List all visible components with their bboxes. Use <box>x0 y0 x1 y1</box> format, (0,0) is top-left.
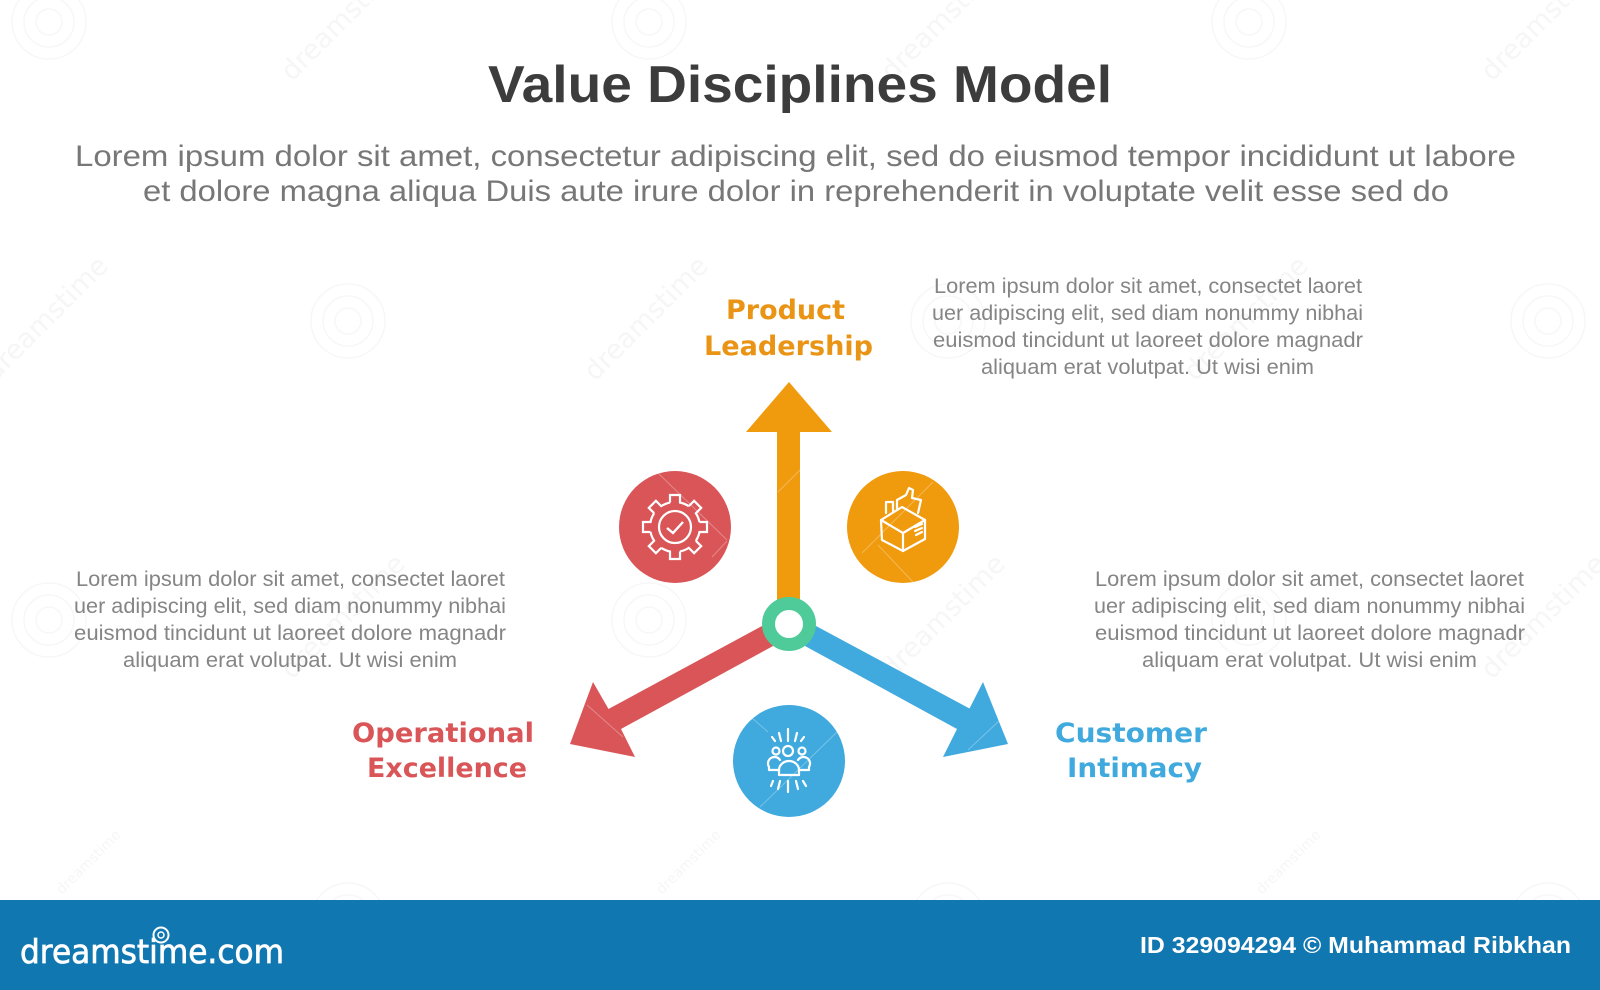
label: customer intimacy: Customer <box>1055 718 1208 749</box>
text block: customer intimacy: aliquam erat volutpat. Ut wisi enim <box>1142 648 1477 672</box>
text block: customer intimacy: euismod tincidunt ut laoreet dolore magnadr <box>1095 621 1525 645</box>
label: product leadership: Product <box>726 295 845 326</box>
label: operational excellence <box>352 718 534 784</box>
footer credit: ID 329094294 © Muhammad Ribkhan <box>1140 932 1571 958</box>
label: customer intimacy: Intimacy <box>1067 753 1202 784</box>
text block: operational excellence: euismod tincidunt ut laoreet dolore magnadr <box>74 621 506 645</box>
arrow: operational excellence <box>570 626 773 757</box>
text block: operational excellence <box>74 567 506 672</box>
icon: gear check on red circle <box>619 471 731 583</box>
subtitle text block: et dolore magna aliqua Duis aute irure dolor in reprehenderit in voluptate velit esse sed do <box>143 175 1449 208</box>
label: product leadership: Leadership <box>704 331 873 362</box>
footer logo: dreamstime.com <box>20 932 284 971</box>
text block: customer intimacy: Lorem ipsum dolor sit amet, consectet laoret <box>1095 567 1524 591</box>
label: customer intimacy <box>1055 718 1208 784</box>
text: dreamstime <box>578 250 715 387</box>
text: dreamstime <box>275 548 412 685</box>
text block: product leadership: uer adipiscing elit, sed diam nonummy nibhai <box>932 301 1363 325</box>
text block: product leadership: Lorem ipsum dolor sit amet, consectet laoret <box>934 274 1362 298</box>
text block: product leadership: euismod tincidunt ut laoreet dolore magnadr <box>933 328 1363 352</box>
subtitle text block <box>75 140 1516 208</box>
subtitle text block: Lorem ipsum dolor sit amet, consectetur adipiscing elit, sed do eiusmod tempor incididunt ut labore <box>75 140 1516 173</box>
text block: operational excellence: Lorem ipsum dolor sit amet, consectet laoret <box>76 567 505 591</box>
label: product leadership <box>704 295 873 362</box>
text: dreamstime <box>54 827 124 898</box>
center ring <box>768 604 810 644</box>
icon: box with thumbs up on orange circle <box>847 471 959 583</box>
text: dreamstime <box>1254 827 1324 898</box>
title: Value Disciplines Model <box>488 56 1112 114</box>
arrow: customer intimacy <box>805 626 1008 757</box>
text block: customer intimacy <box>1094 567 1525 672</box>
text block: operational excellence: uer adipiscing elit, sed diam nonummy nibhai <box>74 594 506 618</box>
label: operational excellence: Excellence <box>367 753 527 784</box>
text block: operational excellence: aliquam erat volutpat. Ut wisi enim <box>123 648 457 672</box>
text block: product leadership: aliquam erat volutpat. Ut wisi enim <box>981 355 1314 379</box>
text: dreamstime <box>1178 250 1315 387</box>
text: dreamstime <box>875 548 1012 685</box>
text block: customer intimacy: uer adipiscing elit, sed diam nonummy nibhai <box>1094 594 1525 618</box>
label: operational excellence: Operational <box>352 718 534 749</box>
icon: people group on blue circle <box>733 705 845 817</box>
text block: product leadership <box>932 274 1363 379</box>
arrow: product leadership <box>746 382 832 600</box>
footer bar <box>0 900 1600 990</box>
text: dreamstime <box>654 827 724 898</box>
